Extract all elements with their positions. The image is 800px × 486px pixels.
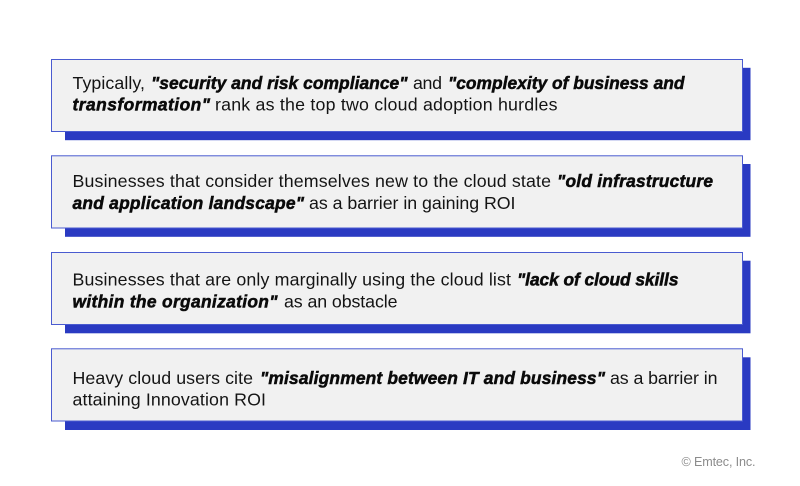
text block: misalignment barrier: Heavy cloud users cite xyxy=(72,368,253,388)
text block: misalignment barrier: attaining Innovation ROI xyxy=(72,390,266,410)
text block: old infrastructure barrier: and application landscape" xyxy=(72,193,305,213)
text block: old infrastructure barrier: Businesses that consider themselves new to the cloud state xyxy=(72,171,551,191)
text block: lack of cloud skills: "lack of cloud skills xyxy=(517,270,679,290)
text block: security and complexity hurdles xyxy=(72,73,685,115)
text block: lack of cloud skills: as an obstacle xyxy=(284,291,398,311)
panel: marginal cloud users xyxy=(52,252,750,333)
text block: security and complexity hurdles: transformation" xyxy=(72,95,211,115)
text block: old infrastructure barrier: "old infrastructure xyxy=(557,171,713,191)
text block: misalignment barrier xyxy=(72,368,718,410)
text block: security and complexity hurdles: "security and risk compliance" xyxy=(151,73,408,93)
panel: heavy cloud users xyxy=(52,349,750,430)
text block: security and complexity hurdles: Typically, xyxy=(72,73,145,93)
panel: new to the cloud xyxy=(52,156,750,237)
text block: lack of cloud skills xyxy=(72,270,679,311)
text block: misalignment barrier: as a barrier in xyxy=(610,368,718,388)
text block: old infrastructure barrier: as a barrier in gaining ROI xyxy=(309,193,516,213)
copyright credit: © Emtec, Inc. xyxy=(682,455,756,469)
text block: misalignment barrier: "misalignment between IT and business" xyxy=(260,368,606,388)
text block: security and complexity hurdles: rank as the top two cloud adoption hurdles xyxy=(215,95,558,115)
text block: security and complexity hurdles: and xyxy=(413,73,442,93)
text block: old infrastructure barrier xyxy=(72,171,713,213)
text block: security and complexity hurdles: "complexity of business and xyxy=(448,73,685,93)
text block: lack of cloud skills: within the organization" xyxy=(72,291,278,311)
text block: lack of cloud skills: Businesses that are only marginally using the cloud list xyxy=(72,270,511,290)
panel: top two cloud adoption hurdles xyxy=(52,60,750,140)
